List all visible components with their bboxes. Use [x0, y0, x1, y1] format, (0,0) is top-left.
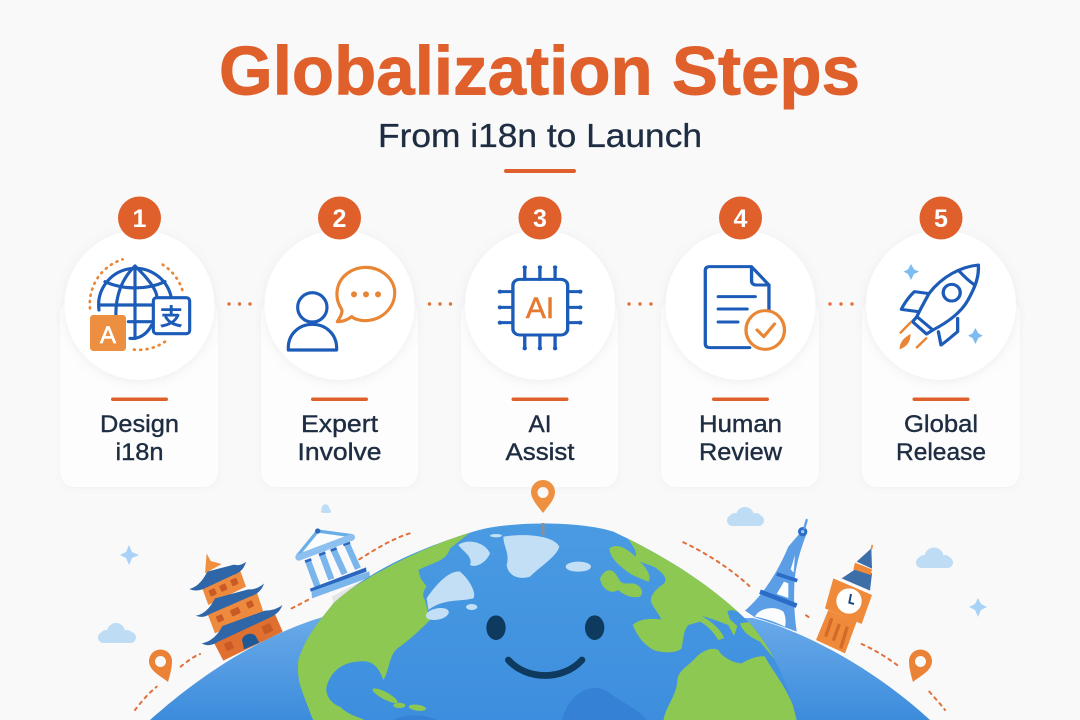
label 5 [896, 411, 986, 466]
icon circle 2 [264, 230, 414, 380]
panel: step 2 expert involve [261, 196, 418, 487]
panel: step 3 ai assist [461, 196, 618, 487]
divider 4 [712, 398, 769, 401]
connector dots 1-2 [227, 302, 252, 306]
icon: globe with translation: 支 [160, 304, 183, 330]
map pin: left [149, 650, 172, 682]
card 2 [261, 298, 418, 487]
label 1: i18n [116, 439, 164, 466]
badge 4: 4 [734, 205, 748, 233]
label 1: Design [100, 411, 179, 438]
badge 2 [318, 196, 361, 240]
landmark: eiffel tower [745, 520, 807, 632]
badge 3 [518, 196, 562, 240]
divider 2 [311, 398, 368, 401]
label 5: Global [904, 411, 978, 438]
label 2: Expert [301, 411, 378, 438]
back globe [150, 617, 930, 720]
icon: globe with translation: A [100, 322, 116, 349]
badge 2: 2 [333, 205, 346, 233]
flight path dashes [135, 533, 945, 710]
label 3 [506, 411, 575, 466]
label 4: Human [699, 411, 782, 438]
badge 5: 5 [934, 205, 948, 233]
card 5 [862, 298, 1020, 487]
sky: clouds [98, 504, 953, 643]
panel: step 1 design i18n [60, 196, 218, 487]
card 3 [461, 298, 618, 487]
connector dots 4-5 [828, 302, 854, 306]
icon circle 3 [465, 230, 615, 380]
card 4 [661, 298, 819, 487]
label 2 [298, 411, 382, 466]
label 4 [699, 411, 783, 466]
label 5: Release [896, 439, 986, 466]
label 2: Involve [298, 439, 382, 466]
badge 5 [920, 196, 962, 240]
continents [295, 530, 810, 720]
smiley face [486, 615, 604, 675]
ai text: AI [526, 292, 554, 325]
label 3: AI [528, 411, 552, 438]
connector dots 3-4 [627, 302, 653, 306]
icon: rocket [900, 264, 983, 349]
divider 1 [111, 398, 168, 401]
card 1 [60, 298, 218, 487]
label 1 [100, 411, 179, 466]
landmark: classical temple [297, 528, 370, 608]
title underline [504, 169, 576, 173]
panel: step 5 global release [862, 196, 1020, 487]
label 4: Review [699, 439, 783, 466]
subtitle: From i18n to Launch [378, 117, 702, 154]
pin stem [542, 523, 544, 535]
icon circle 1 [64, 230, 214, 380]
front globe [295, 524, 810, 720]
badge 4 [719, 196, 762, 240]
divider 5 [912, 398, 970, 401]
icon: globe with translation [90, 259, 190, 351]
title: Globalization Steps [219, 32, 860, 110]
landmark: pagoda [189, 553, 283, 661]
badge 1 [118, 196, 161, 240]
icon: document with check [705, 267, 784, 349]
ocean [298, 524, 797, 720]
landmark: clock tower [816, 545, 872, 653]
map pin: top [531, 480, 555, 513]
badge 1: 1 [133, 205, 147, 233]
panel: step 4 human review [661, 196, 819, 487]
icon: expert with speech bubble [288, 267, 395, 350]
connector dots 2-3 [428, 302, 452, 306]
label 3: Assist [506, 439, 575, 466]
icon circle 5 [866, 230, 1016, 380]
icon: ai chip [498, 265, 582, 350]
badge 3: 3 [533, 205, 547, 233]
sky: sparkles [120, 545, 987, 617]
icon circle 4 [666, 230, 816, 380]
divider 3 [512, 398, 568, 401]
map pin: right [909, 650, 932, 682]
